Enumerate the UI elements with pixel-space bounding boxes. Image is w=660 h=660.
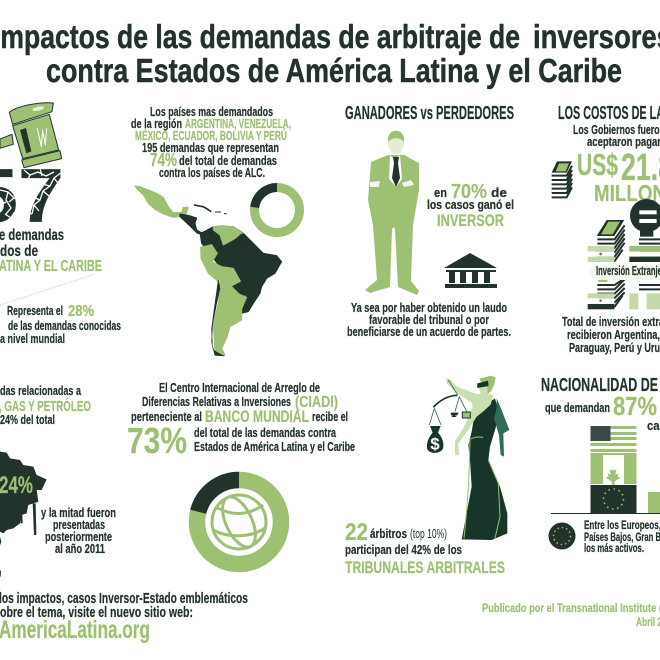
text: US$ 21.8 millones: US$	[577, 147, 618, 182]
icon: stack with vertical flag	[629, 285, 660, 309]
icon: man in suit	[365, 131, 419, 295]
text: demandas relacionadas	[0, 384, 91, 427]
text: 28 por ciento: Representa el	[7, 304, 63, 318]
text: demandas relacionadas: 24% del total	[0, 413, 55, 427]
text: laudo: beneficiarse de un acuerdo de partes.	[347, 325, 511, 339]
text: 24 por ciento: 24%	[0, 472, 33, 499]
icons: money stacks and flags	[552, 161, 660, 309]
text: mitad 2011: posteriormente	[45, 530, 112, 544]
text: 70 por ciento: los casos ganó el	[427, 198, 514, 212]
panel: cierre enlace	[0, 590, 248, 644]
text: árbitros: participan del 42% de los	[345, 543, 462, 557]
icon: World Bank globe	[212, 492, 266, 552]
text: demandas relacionadas: , GAS Y PETRÓLEO	[0, 397, 91, 415]
text: publicado por	[482, 601, 660, 629]
icon: equals circle	[630, 199, 660, 237]
chart: bars of flags	[551, 426, 660, 514]
text: gobiernos	[573, 123, 660, 149]
text: demandas relacionadas: das relacionadas a	[0, 384, 82, 398]
text: árbitros	[345, 519, 505, 577]
text: laudo	[347, 301, 511, 339]
icon: gavel	[0, 103, 62, 168]
map: América Latina	[135, 186, 282, 356]
text: CIADI: BANCO MUNDIAL	[205, 407, 309, 426]
panel: países más demandados	[131, 105, 300, 356]
chart: donut 74%	[254, 188, 300, 232]
title	[0, 18, 660, 89]
panel: total de demandas	[0, 103, 121, 346]
panel: árbitros	[345, 376, 509, 577]
text: 73 por ciento: 73%	[127, 420, 187, 461]
panel: los costos	[552, 103, 660, 355]
text: países: MÉXICO, ECUADOR, BOLIVIA Y PERÚ	[135, 128, 287, 143]
text: mitad 2011: al año 2011	[55, 542, 105, 556]
text: países: contra los países de ALC.	[159, 166, 265, 180]
text: demandas	[0, 227, 102, 275]
text: 70 por ciento: INVERSOR	[437, 211, 504, 230]
text: árbitros: árbitros	[370, 527, 407, 541]
illustration: Lady Justice: $	[430, 434, 440, 453]
panel: CIADI	[127, 381, 355, 564]
text: CIADI: Diferencias Relativas a Inversiones	[142, 395, 291, 409]
panel: cierre enlace: obre el tema, visite el nuevo sitio web:	[0, 604, 193, 621]
text: países: de la región	[131, 117, 182, 131]
text: mitad 2011: y la mitad fueron	[41, 506, 116, 520]
text: mitad 2011	[41, 506, 116, 556]
text: países: Los países mas demandados	[150, 105, 273, 119]
panel: cierre enlace: los impactos, casos Inversor-Estado emblemáticos	[0, 590, 248, 607]
text: 87 por ciento: que demandan	[545, 401, 610, 415]
panel: ganadores vs perdedores	[345, 103, 514, 339]
text: mitad 2011: presentadas	[53, 518, 105, 532]
chart: donut 73%	[197, 480, 281, 564]
text: 28 por ciento: a nivel mundial	[0, 332, 65, 346]
illustration: Lady Justice	[427, 376, 509, 540]
panel: minería gas y petróleo	[0, 384, 116, 577]
text: 87 por ciento	[545, 391, 660, 433]
text: 70 por ciento	[427, 181, 514, 230]
icon: EU circle	[548, 522, 576, 550]
icon: stack with Argentina flag	[588, 220, 625, 262]
text: demandas: e demandas	[0, 227, 64, 244]
text: países: 74%	[150, 150, 177, 170]
icon: bank	[444, 253, 497, 288]
text: laudo: Ya sea por haber obtenido un laudo	[351, 301, 507, 315]
panel: cierre enlace: AmericaLatina.org	[0, 616, 150, 644]
text: países: del total de demandas	[179, 154, 277, 168]
text: demandas: dos de	[0, 243, 38, 260]
icon: small stack	[552, 161, 572, 197]
text: demandas: ATINA Y EL CARIBE	[0, 258, 102, 275]
text: 28 por ciento: 28%	[68, 303, 94, 320]
text: 70 por ciento: de	[491, 186, 507, 200]
text: CIADI: Estados de América Latina y el Caribe	[194, 440, 355, 454]
text: CIADI: del total de las demandas contra	[194, 426, 337, 440]
text: 28 por ciento: de las demandas conocidas	[8, 319, 121, 333]
text: 28 por ciento	[0, 303, 121, 346]
text: países	[131, 105, 291, 180]
title: Impactos de las demandas de arbitraje de	[0, 18, 520, 55]
text: total inversión	[562, 315, 660, 355]
icon: stack with Paraguay flag	[588, 278, 625, 309]
icon: stack with dark flag	[629, 239, 660, 262]
text: CIADI: perteneciente al	[131, 410, 202, 424]
text: árbitros: TRIBUNALES ARBITRALES	[345, 558, 505, 577]
text: CIADI: El Centro Internacional de Arreglo de	[159, 381, 320, 395]
text: árbitros: (top 10%)	[410, 527, 447, 541]
heading: GANADORES vs PERDEDORES	[345, 103, 514, 123]
text: US$ 21.8 millones	[577, 147, 660, 206]
text: árbitros: 22	[345, 519, 368, 546]
text: países: 195 demandas que representan	[142, 141, 279, 155]
text: laudo: favorable del tribunal o por	[369, 313, 489, 327]
text: CIADI	[131, 381, 355, 454]
text: países: ARGENTINA, VENEZUELA,	[185, 117, 291, 131]
text: CIADI: (CIADI)	[295, 394, 338, 411]
text: europeos	[584, 520, 660, 555]
panel: nacionalidad	[541, 375, 660, 555]
icon: oil splatter	[0, 452, 47, 577]
text: 70 por ciento: 70%	[451, 181, 487, 203]
text: CIADI: recibe el	[312, 410, 348, 424]
text: 70 por ciento: en	[434, 186, 447, 200]
